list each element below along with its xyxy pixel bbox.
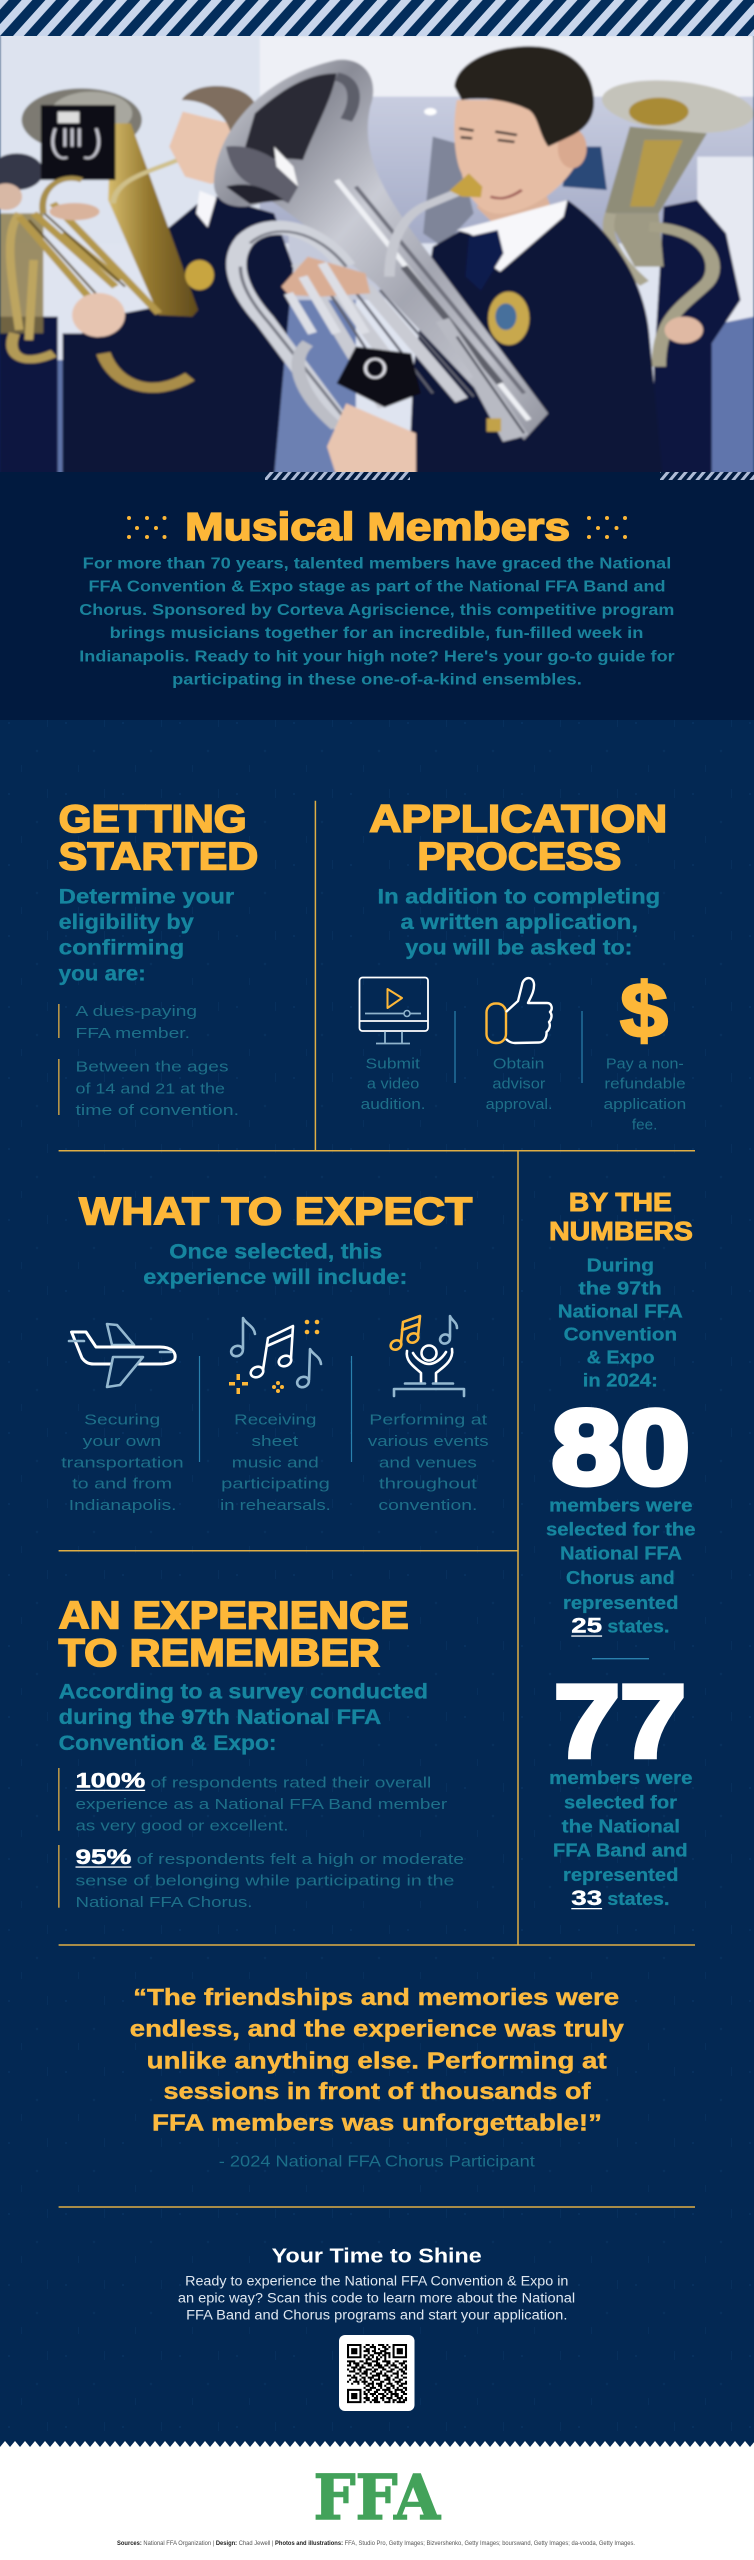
caption: sheet music: participating <box>221 1476 330 1493</box>
subheading: application: a written application, <box>400 911 638 934</box>
stat text: chorus: Chorus and <box>566 1568 675 1588</box>
intro band background <box>0 472 754 720</box>
stat text: band: FFA Band and <box>553 1841 688 1861</box>
intro paragraph: For more than 70 years, talented members have graced the National <box>83 555 671 572</box>
stat: 95 percent chorus: National FFA Chorus. <box>76 1894 252 1911</box>
quote: “The friendships and memories were <box>133 1984 619 2010</box>
quote attribution: - 2024 National FFA Chorus Participant <box>219 2154 535 2171</box>
heading: application process: PROCESS <box>417 835 621 878</box>
caption: submit video: Submit <box>366 1055 421 1072</box>
stat: 95 percent chorus: of respondents felt a high or moderate <box>137 1851 464 1868</box>
subheading: during convention: the 97th <box>578 1279 662 1299</box>
panel: by the numbers <box>546 1187 696 1910</box>
caption: sheet music: Receiving <box>234 1411 316 1428</box>
subheading: during convention: National FFA <box>558 1302 683 1322</box>
caption: advisor approval: approval. <box>486 1096 552 1113</box>
intro paragraph: FFA Convention & Expo stage as part of the National FFA Band and <box>88 579 666 596</box>
big number: 80: 80 <box>552 1390 690 1506</box>
icon: right sparkle dots <box>587 516 627 539</box>
subheading: application: you will be asked to: <box>405 937 632 960</box>
caption: application fee: fee. <box>632 1116 657 1134</box>
heading: an experience to remember: TO REMEMBER <box>59 1632 380 1675</box>
heading: getting started: GETTING <box>59 798 247 841</box>
caption: performing: and venues <box>379 1454 477 1471</box>
caption: transportation: to and from <box>72 1476 172 1493</box>
heading: application process <box>369 798 667 878</box>
caption: application fee: Pay a non- <box>606 1055 684 1072</box>
icon: music notes <box>229 1318 321 1394</box>
stat text: chorus: selected for the <box>546 1520 696 1540</box>
text block: scan the code: Ready to experience the National FFA Convention & Expo in <box>185 2274 568 2289</box>
stat: 100 percent band: experience as a National FFA Band member <box>76 1796 447 1813</box>
caption: application fee: refundable <box>604 1075 686 1092</box>
stat text: band: represented <box>563 1865 678 1885</box>
stat text: chorus: members were <box>549 1496 692 1516</box>
stat text: chorus <box>546 1496 696 1638</box>
intro paragraph: brings musicians together for an incredible, fun-filled week in <box>110 625 643 642</box>
list: eligibility items: Between the ages <box>76 1059 228 1076</box>
caption: performing <box>368 1411 489 1514</box>
text block: scan the code: FFA Band and Chorus programs and start your application. <box>186 2307 567 2322</box>
heading: by the numbers: BY THE <box>569 1187 672 1217</box>
quote <box>130 1984 624 2136</box>
subheading: once selected <box>143 1240 407 1289</box>
top stripe band <box>0 0 754 36</box>
subheading: once selected: Once selected, this <box>169 1240 382 1263</box>
stat: 95 percent chorus: 95% <box>76 1846 132 1869</box>
list: eligibility items <box>58 1003 239 1119</box>
caption: transportation: Indianapolis. <box>69 1497 176 1514</box>
subheading: survey: during the 97th National FFA <box>59 1706 381 1729</box>
intro paragraph: participating in these one-of-a-kind ensembles. <box>172 672 582 689</box>
photo bottom hatch strip <box>265 472 754 480</box>
subheading: during convention: in 2024: <box>583 1371 658 1391</box>
heading: application process: APPLICATION <box>369 798 667 841</box>
panel: application process <box>360 798 686 1134</box>
title: Musical Members: Musical Members <box>185 506 570 549</box>
stat text: band: 33 <box>571 1887 602 1910</box>
icon: video monitor <box>360 978 428 1044</box>
list: eligibility items: A dues-paying <box>76 1003 197 1020</box>
stat text: band: the National <box>562 1817 680 1837</box>
text block: scan the code: an epic way? Scan this code to learn more about the National <box>178 2290 575 2305</box>
caption: performing: convention. <box>378 1497 477 1514</box>
list: eligibility items: of 14 and 21 at the <box>76 1080 225 1097</box>
caption: submit video <box>361 1055 426 1113</box>
heading: by the numbers: NUMBERS <box>549 1216 693 1246</box>
stat: 100 percent band <box>58 1768 447 1834</box>
quote: endless, and the experience was truly <box>130 2016 624 2042</box>
stat text: band: states. <box>607 1889 669 1909</box>
subheading: during convention <box>558 1256 683 1391</box>
intro paragraph: Indianapolis. Ready to hit your high note? Here's your go-to guide for <box>79 648 675 666</box>
subheading: during convention: & Expo <box>587 1348 654 1368</box>
footer: white band with zigzag edge <box>0 2441 754 2560</box>
stat text: band: members were <box>549 1768 692 1788</box>
caption: transportation <box>61 1411 184 1514</box>
caption: advisor approval <box>486 1055 552 1113</box>
heading: what to expect: WHAT TO EXPECT <box>79 1190 472 1233</box>
intro paragraph <box>79 555 675 689</box>
subheading: survey: Convention & Expo: <box>59 1732 277 1755</box>
stat text: chorus: states. <box>607 1617 669 1637</box>
stat: 100 percent band: 100% <box>76 1769 146 1792</box>
subheading: application: In addition to completing <box>378 885 660 908</box>
subheading: eligibility: eligibility by <box>59 911 194 934</box>
heading: an experience to remember: AN EXPERIENCE <box>59 1594 409 1637</box>
texture: main panel speckle <box>0 720 754 2444</box>
stat: 100 percent band: of respondents rated their overall <box>150 1774 431 1791</box>
caption: sheet music <box>220 1411 331 1514</box>
subheading: eligibility: confirming <box>59 937 184 960</box>
caption: sheet music: sheet <box>252 1433 299 1450</box>
big number: 77: 77 <box>554 1664 686 1779</box>
stat: 100 percent band: as very good or excellent. <box>76 1817 288 1834</box>
caption: application fee: application <box>604 1096 686 1113</box>
subheading: once selected: experience will include: <box>143 1266 407 1289</box>
caption: application fee <box>604 1055 686 1134</box>
list: eligibility items: time of convention. <box>76 1102 239 1119</box>
caption: transportation: your own <box>83 1433 161 1450</box>
panel: an experience to remember <box>58 1594 464 1911</box>
panel: what to expect <box>61 1190 489 1514</box>
quote: FFA members was unforgettable!” <box>152 2110 602 2136</box>
stat text: band: selected for <box>564 1792 677 1812</box>
icon: performer with notes <box>389 1316 464 1396</box>
caption: performing: various events <box>368 1433 489 1450</box>
stat: 95 percent chorus <box>58 1845 464 1911</box>
caption: advisor approval: advisor <box>492 1075 545 1092</box>
stat text: band <box>549 1768 692 1910</box>
heading: getting started <box>59 798 258 878</box>
subheading: eligibility: you are: <box>59 962 146 985</box>
logo: FFA: FFA <box>314 2461 441 2534</box>
icon: airplane <box>69 1324 175 1387</box>
subheading: application <box>378 885 660 960</box>
stat text: chorus: represented <box>563 1593 678 1613</box>
panel: your time to shine <box>178 2246 575 2411</box>
heading: your time to shine: Your Time to Shine <box>272 2246 482 2268</box>
intro paragraph: Chorus. Sponsored by Corteva Agriscience, this competitive program <box>79 602 674 619</box>
subheading: survey: According to a survey conducted <box>59 1680 428 1703</box>
caption: transportation: transportation <box>61 1454 184 1471</box>
stat: 95 percent chorus: sense of belonging while participating in the <box>76 1873 454 1890</box>
caption: performing: Performing at <box>369 1411 488 1428</box>
text block: scan the code <box>178 2274 575 2322</box>
icon: thumbs up <box>486 978 552 1043</box>
caption: sheet music: music and <box>232 1454 319 1471</box>
quote: sessions in front of thousands of <box>164 2078 591 2104</box>
photo: FFA band members playing euphoniums <box>0 33 754 477</box>
heading: an experience to remember <box>59 1594 409 1675</box>
caption: transportation: Securing <box>84 1411 160 1428</box>
sources line: Sources: National FFA Organization | Design: Chad Jewell | Photos and illustrations: FFA, Studio Pro, Getty Images; Bizvershenko, Getty Images; bourswand, Getty Images; da-vooda, Getty Images. <box>117 2540 635 2547</box>
list: eligibility items: FFA member. <box>76 1025 190 1042</box>
stat text: chorus: 25 <box>571 1615 603 1638</box>
icon: dollar sign: $ <box>620 966 668 1054</box>
quote: unlike anything else. Performing at <box>147 2047 607 2073</box>
panel: getting started <box>58 798 258 1119</box>
caption: submit video: audition. <box>361 1096 426 1113</box>
subheading: survey <box>59 1680 428 1755</box>
subheading: eligibility <box>59 885 234 985</box>
caption: sheet music: in rehearsals. <box>220 1497 331 1514</box>
subheading: during convention: During <box>587 1256 654 1276</box>
caption: submit video: a video <box>367 1075 419 1092</box>
stat text: chorus: National FFA <box>560 1544 682 1564</box>
icon: left sparkle dots <box>127 516 166 539</box>
heading: by the numbers <box>549 1187 693 1246</box>
QR code <box>339 2335 414 2411</box>
heading: getting started: STARTED <box>59 835 258 878</box>
caption: performing: throughout <box>379 1476 478 1493</box>
caption: advisor approval: Obtain <box>493 1055 544 1072</box>
subheading: during convention: Convention <box>564 1325 677 1345</box>
subheading: eligibility: Determine your <box>59 885 234 908</box>
